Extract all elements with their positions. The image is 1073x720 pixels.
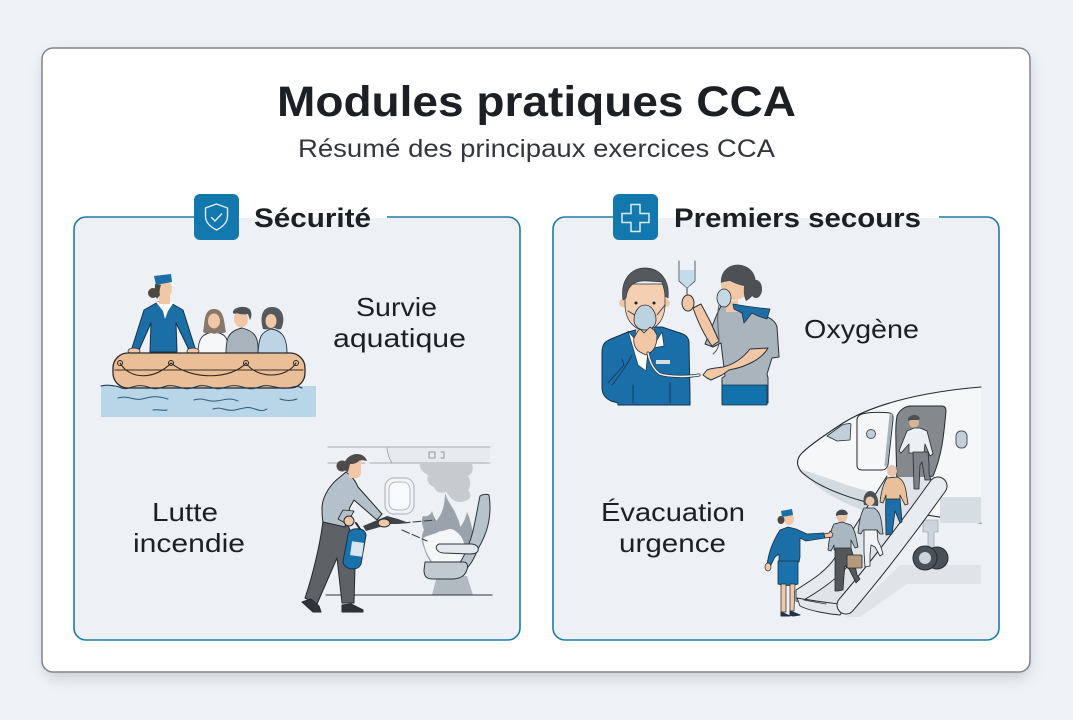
label: Évacuation urgence: Évacuation xyxy=(601,497,745,527)
label: Évacuation urgence: urgence xyxy=(619,528,726,558)
title: Modules pratiques CCA xyxy=(277,78,796,126)
label: Évacuation urgence xyxy=(601,497,745,558)
label: Lutte incendie: Lutte xyxy=(152,497,218,527)
window xyxy=(385,478,414,514)
icon: medical cross xyxy=(613,194,658,240)
seat xyxy=(432,576,473,595)
label: Survie aquatique xyxy=(333,292,466,353)
passenger 2 xyxy=(880,465,908,535)
door xyxy=(857,412,893,470)
plane fuselage xyxy=(798,387,981,523)
card xyxy=(42,48,1030,672)
IV bag xyxy=(679,261,695,288)
water xyxy=(101,386,316,417)
ground shadow xyxy=(846,565,981,617)
label: Lutte incendie xyxy=(133,497,245,558)
passenger 3 xyxy=(858,491,883,567)
attendant xyxy=(765,509,833,616)
passengers xyxy=(198,332,228,353)
woman xyxy=(705,304,779,403)
porthole xyxy=(956,431,967,448)
panel: Sécurité xyxy=(74,194,520,640)
heading: Premiers secours: Premiers secours xyxy=(674,203,921,233)
passenger 4 with case xyxy=(828,510,862,591)
cockpit window xyxy=(827,424,851,441)
spray xyxy=(402,520,435,541)
label: Survie aquatique: aquatique xyxy=(333,323,466,353)
slide xyxy=(797,477,935,612)
raft xyxy=(113,353,305,388)
panel: Premiers secours xyxy=(553,194,999,640)
icon: shield xyxy=(194,194,239,240)
extinguisher xyxy=(343,529,366,569)
waves xyxy=(101,385,302,389)
label: Survie aquatique: Survie xyxy=(356,292,437,322)
landing gear xyxy=(923,520,938,548)
heading: Sécurité: Sécurité xyxy=(254,203,371,233)
door opening xyxy=(896,406,946,486)
illustration: evacuation xyxy=(765,387,981,617)
man xyxy=(602,327,690,405)
smoke xyxy=(420,464,473,502)
flames xyxy=(422,493,473,565)
floor xyxy=(326,594,492,596)
label: Oxygène: Oxygène xyxy=(804,314,919,344)
subtitle: Résumé des principaux exercices CCA xyxy=(298,135,775,163)
passenger in door xyxy=(899,415,933,489)
attendant xyxy=(132,302,195,352)
illustration: oxygen xyxy=(602,261,779,405)
illustration: life raft xyxy=(101,274,316,417)
label: Lutte incendie: incendie xyxy=(133,528,245,558)
illustration: firefighting xyxy=(302,447,492,612)
cabin xyxy=(388,447,490,463)
firefighter xyxy=(305,520,355,604)
wing shadow xyxy=(940,497,981,523)
